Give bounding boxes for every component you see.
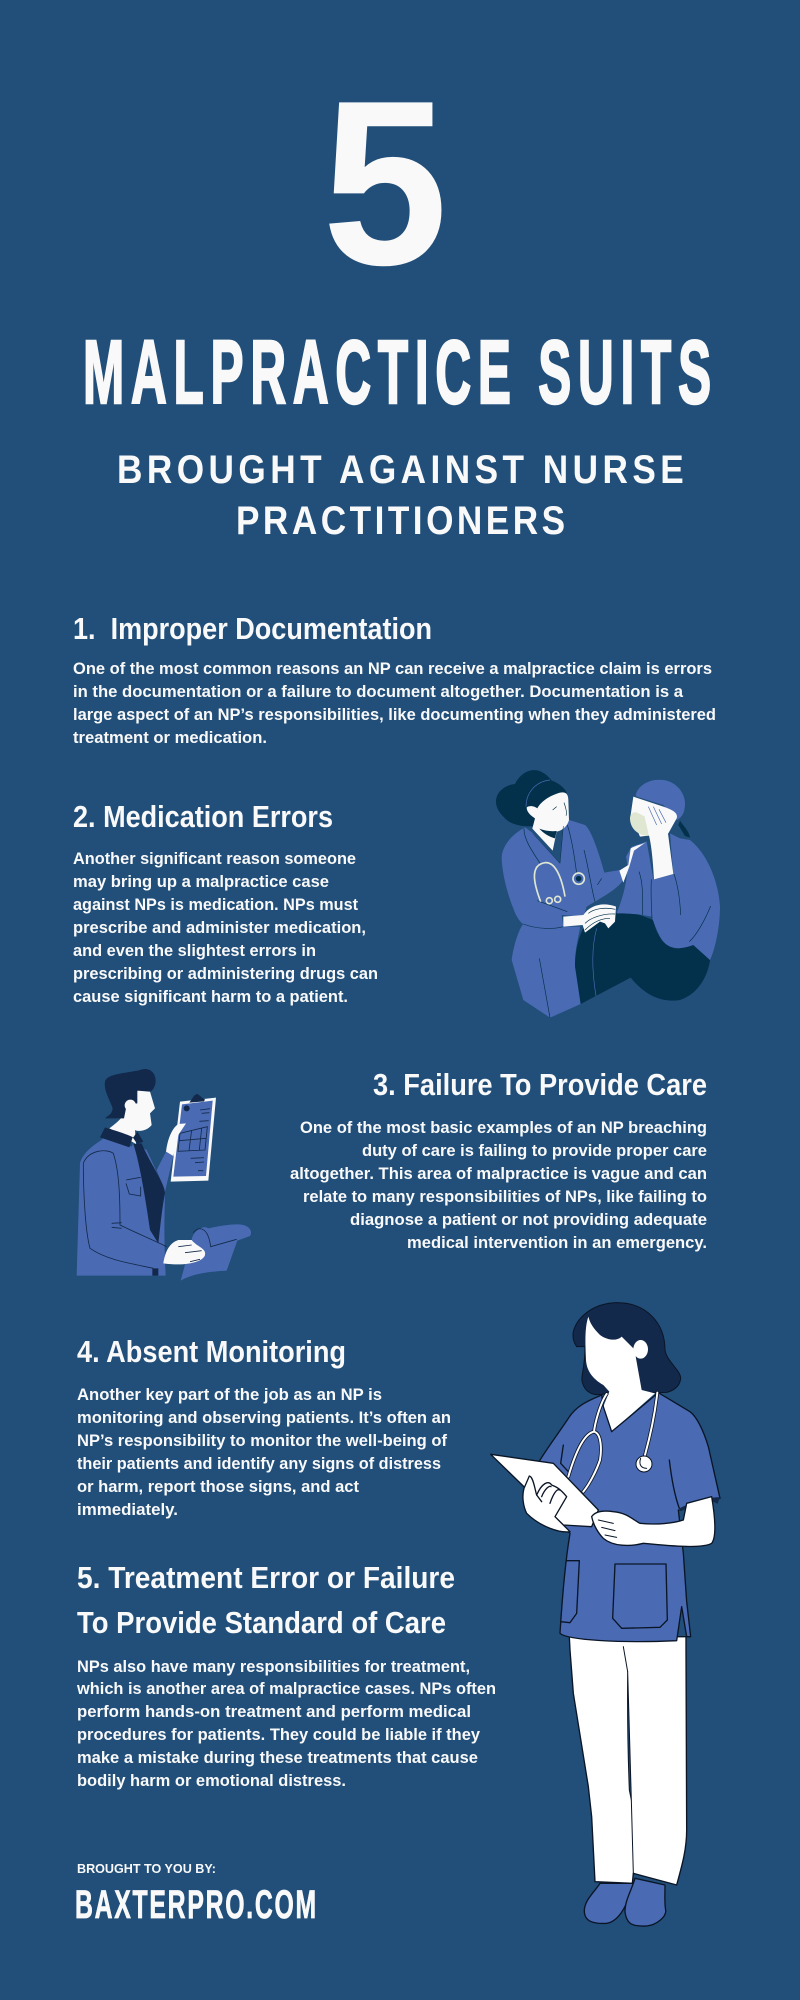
- tablet: [491, 1454, 598, 1527]
- heading 2: 2. Medication Errors: [73, 799, 333, 834]
- illustration: doctor comforting patient: [496, 770, 720, 1018]
- brand name: BAXTERPRO.COM: [75, 1883, 316, 1928]
- patient face: [631, 797, 677, 837]
- body 4: or harm, report those signs, and act: [77, 1478, 359, 1496]
- face and neck: [585, 1317, 655, 1432]
- section 4: absent monitoring: [77, 1334, 451, 1519]
- sleeve cuff: [679, 1497, 720, 1511]
- doctor hand on shoulder: [619, 842, 647, 883]
- stethoscope: [568, 1393, 657, 1492]
- footer credit: [75, 1861, 316, 1928]
- body 4: NP’s responsibility to monitor the well-being of: [77, 1432, 448, 1450]
- body 4: Another key part of the job as an NP is: [77, 1386, 382, 1404]
- body 1: treatment or medication.: [73, 729, 267, 747]
- subtitle: PRACTITIONERS: [236, 498, 565, 542]
- shoes: [584, 1878, 666, 1926]
- stethoscope: [534, 863, 584, 904]
- patient cap and tail: [678, 821, 690, 838]
- body 5: perform hands-on treatment and perform medical: [77, 1703, 471, 1721]
- right arm and hand: [592, 1497, 715, 1546]
- body 1: in the documentation or a failure to document altogether. Documentation is a: [73, 683, 684, 701]
- body 1: [73, 660, 716, 747]
- body 1: large aspect of an NP’s responsibilities, like documenting when they administered: [73, 706, 716, 724]
- doctor body: [502, 819, 623, 1018]
- body 2: against NPs is medication. NPs must: [73, 896, 358, 914]
- title block: [83, 51, 711, 542]
- body 4: monitoring and observing patients. It’s often an: [77, 1409, 451, 1427]
- arm raised: [157, 1152, 173, 1192]
- patient body: [617, 833, 720, 960]
- clipboard: [171, 1094, 216, 1182]
- body 5: which is another area of malpractice cases. NPs often: [76, 1680, 496, 1698]
- body 3: diagnose a patient or not providing adequate: [350, 1211, 707, 1229]
- body 4: [77, 1386, 451, 1519]
- body 3: [290, 1119, 707, 1252]
- body 2: [73, 850, 378, 1006]
- body 2: prescribe and administer medication,: [73, 919, 366, 937]
- body 3: medical intervention in an emergency.: [407, 1234, 707, 1252]
- body 2: prescribing or administering drugs can: [73, 965, 378, 983]
- doctor hair: [496, 770, 567, 826]
- body 5: NPs also have many responsibilities for treatment,: [77, 1658, 470, 1676]
- section 5: treatment error: [76, 1560, 496, 1790]
- body 5: procedures for patients. They could be liable if they: [77, 1726, 481, 1744]
- heading 5: To Provide Standard of Care: [77, 1605, 446, 1640]
- scrub top: [525, 1393, 720, 1642]
- body 2: Another significant reason someone: [73, 850, 356, 868]
- body 5: bodily harm or emotional distress.: [77, 1772, 346, 1790]
- patient hand over face: [644, 805, 673, 879]
- heading 5: 5. Treatment Error or Failure: [77, 1560, 455, 1595]
- heading 4: 4. Absent Monitoring: [77, 1334, 346, 1369]
- pants: [569, 1637, 687, 1885]
- left hand: [523, 1476, 570, 1532]
- lower hand: [163, 1240, 205, 1264]
- body 3: relate to many responsibilities of NPs, like failing to: [303, 1188, 707, 1206]
- patient legs: [575, 912, 710, 1004]
- body 1: One of the most common reasons an NP can receive a malpractice claim is errors: [73, 660, 712, 678]
- body 4: their patients and identify any signs of distress: [77, 1455, 441, 1473]
- body 5: make a mistake during these treatments that cause: [77, 1749, 478, 1767]
- body 4: immediately.: [77, 1501, 178, 1519]
- doctor neck and face: [527, 792, 569, 851]
- body 2: and even the slightest errors in: [73, 942, 316, 960]
- face and neck: [109, 1090, 155, 1144]
- doctor hand on knee: [563, 904, 616, 933]
- hair: [573, 1303, 681, 1395]
- body 2: may bring up a malpractice case: [73, 873, 329, 891]
- body 3: duty of care is failing to provide proper care: [362, 1142, 707, 1160]
- body 5: [76, 1658, 496, 1790]
- illustration: nurse with tablet: [491, 1303, 720, 1926]
- big number 5: 5: [322, 51, 448, 314]
- collar: [100, 1127, 143, 1147]
- patient mask: [630, 812, 648, 836]
- tie: [133, 1143, 165, 1276]
- heading 1: 1. Improper Documentation: [73, 611, 432, 646]
- body 3: altogether. This area of malpractice is vague and can: [290, 1165, 707, 1183]
- pockets: [561, 1445, 679, 1628]
- brought to you by: BROUGHT TO YOU BY:: [77, 1861, 216, 1876]
- raised hand: [166, 1123, 186, 1156]
- body 3: One of the most basic examples of an NP breaching: [300, 1119, 707, 1137]
- title: malpractice suits: MALPRACTICE SUITS: [83, 322, 711, 423]
- section 3: failure to provide care: [290, 1067, 707, 1252]
- section 1: improper documentation: [73, 611, 716, 747]
- illustration: practitioner with clipboard: [77, 1069, 251, 1281]
- rolled paper: [181, 1224, 251, 1281]
- heading 5: [77, 1560, 455, 1640]
- heading 3: 3. Failure To Provide Care: [373, 1067, 707, 1102]
- jacket seams: [83, 1151, 167, 1268]
- subtitle: BROUGHT AGAINST NURSE: [117, 447, 684, 491]
- hair: [105, 1069, 156, 1118]
- body 2: cause significant harm to a patient.: [73, 988, 348, 1006]
- section 2: medication errors: [73, 799, 378, 1006]
- subtitle: [117, 447, 684, 542]
- jacket: [77, 1138, 166, 1276]
